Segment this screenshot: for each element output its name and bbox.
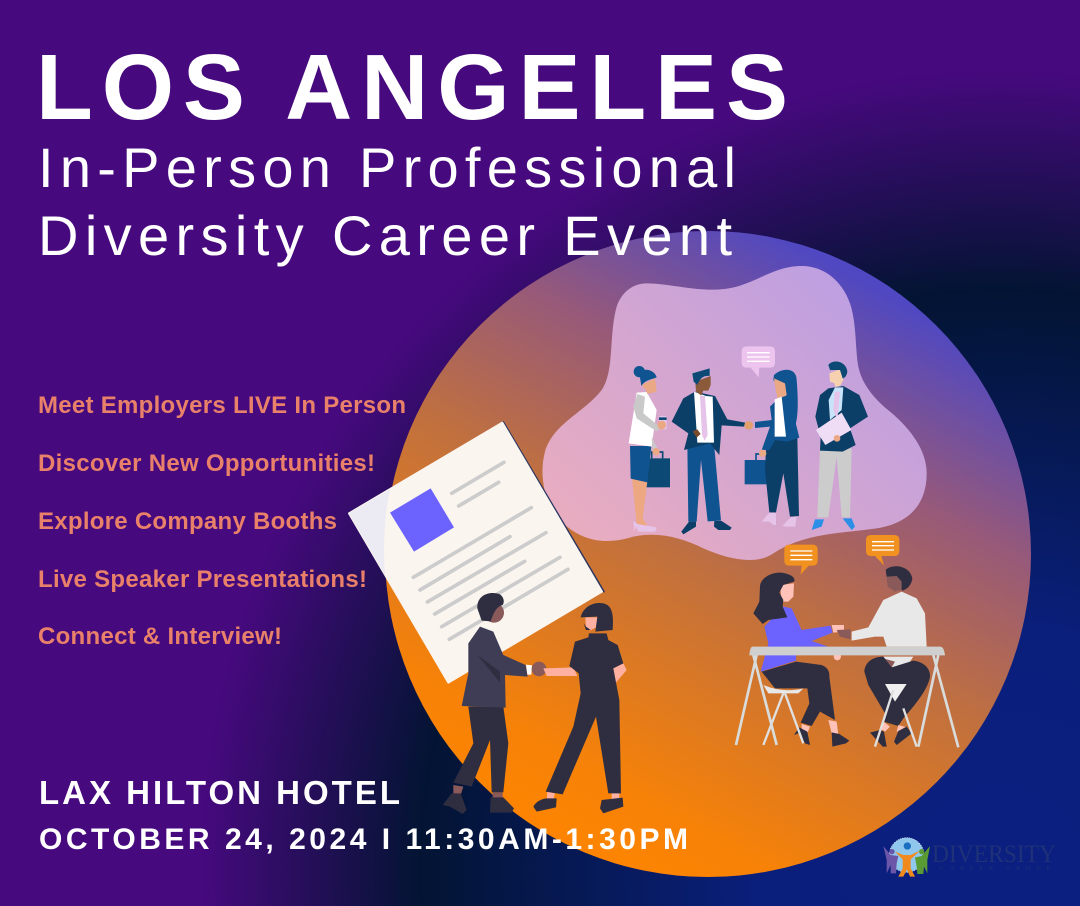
logo tagline: CAREER GROUP xyxy=(940,865,1050,872)
company logo xyxy=(883,838,1056,877)
photo square xyxy=(390,488,454,552)
man with clipboard xyxy=(812,362,868,530)
feature list: Meet Employers LIVE In Person xyxy=(38,392,406,419)
feature list: Explore Company Booths xyxy=(38,508,337,535)
document xyxy=(349,422,604,683)
speech bubble xyxy=(742,346,775,377)
subtitle: Diversity Career Event xyxy=(38,204,732,267)
date and time: OCTOBER 24, 2024 I 11:30AM-1:30PM xyxy=(39,823,688,856)
feature list: Connect & Interview! xyxy=(38,623,282,650)
subtitle: In-Person Professional xyxy=(38,136,736,199)
man in suit xyxy=(443,593,546,814)
title: LOS ANGELES xyxy=(36,35,788,139)
man seated xyxy=(837,566,930,747)
man shaking hands xyxy=(672,368,753,534)
document text lines xyxy=(413,462,568,639)
businesswoman with bag xyxy=(745,370,799,527)
blob backdrop xyxy=(542,266,927,560)
feature list: Live Speaker Presentations! xyxy=(38,566,367,593)
orange gradient circle xyxy=(385,231,1031,877)
woman seated xyxy=(753,573,849,747)
woman with coffee and bag xyxy=(629,366,670,532)
orange speech bubble right xyxy=(866,535,899,565)
woman in black xyxy=(533,603,627,813)
feature list xyxy=(38,392,406,650)
logo wordmark: DIVERSITY xyxy=(932,841,1056,868)
illustration: resume document with handshake xyxy=(349,422,627,814)
illustration: business people on pink blob xyxy=(542,266,927,560)
subtitle xyxy=(38,136,736,267)
illustration: interview at table xyxy=(736,535,958,747)
stools and table xyxy=(736,647,958,747)
venue: LAX HILTON HOTEL xyxy=(39,774,400,811)
feature list: Discover New Opportunities! xyxy=(38,450,375,477)
logo globe emblem xyxy=(883,838,930,877)
orange speech bubble left xyxy=(784,545,818,575)
